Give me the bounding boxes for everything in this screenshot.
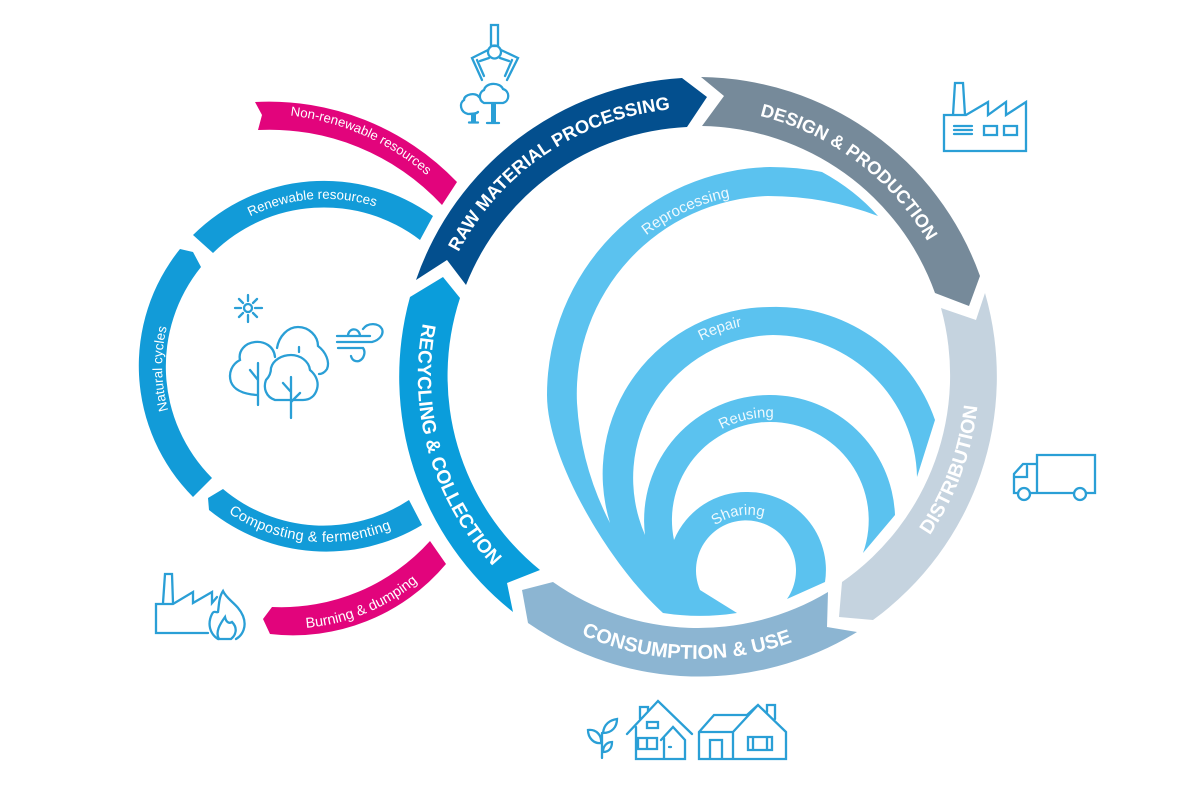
segment: consumption and use (522, 582, 857, 676)
icon: sun, trees and wind (230, 295, 383, 418)
label: Sharing: Sharing (712, 504, 764, 524)
icon: factory (944, 83, 1026, 151)
band: non-renewable resources (255, 102, 457, 205)
band: non-renewable resources: Non-renewable resources (291, 106, 430, 174)
segment: distribution: DISTRIBUTION (919, 406, 978, 534)
segment: recycling and collection (399, 277, 540, 612)
label: Repair: Repair (698, 317, 740, 340)
inner loops: sharing, reusing, repair, reprocessing (547, 167, 935, 616)
segment: recycling and collection: RECYCLING & COLLECTION (418, 324, 502, 566)
segment: raw material processing: RAW MATERIAL PROCESSING (448, 97, 669, 252)
segment: distribution (839, 293, 997, 620)
segment: design and production (701, 77, 980, 306)
segment: design and production: DESIGN & PRODUCTION (761, 104, 938, 240)
band: renewable resources (193, 180, 433, 253)
band: burning and dumping (263, 541, 446, 636)
segment: consumption and use: CONSUMPTION & USE (584, 624, 792, 659)
icon: plant and houses (588, 701, 786, 759)
band: natural cycles: Natural cycles (152, 326, 168, 412)
segment: raw material processing (416, 78, 707, 285)
icon: robotic claw and trees (461, 25, 518, 123)
label: Reusing: Reusing (718, 408, 773, 429)
icon: factory with flame (156, 574, 245, 639)
band: renewable resources: Renewable resources (247, 190, 376, 216)
band: natural cycles (138, 249, 212, 497)
band: burning and dumping: Burning & dumping (306, 576, 418, 628)
band: composting and fermenting (208, 489, 422, 552)
label: Reprocessing: Reprocessing (641, 190, 730, 235)
band: composting and fermenting: Composting & fermenting (230, 506, 391, 543)
icon: delivery truck (1014, 455, 1095, 500)
